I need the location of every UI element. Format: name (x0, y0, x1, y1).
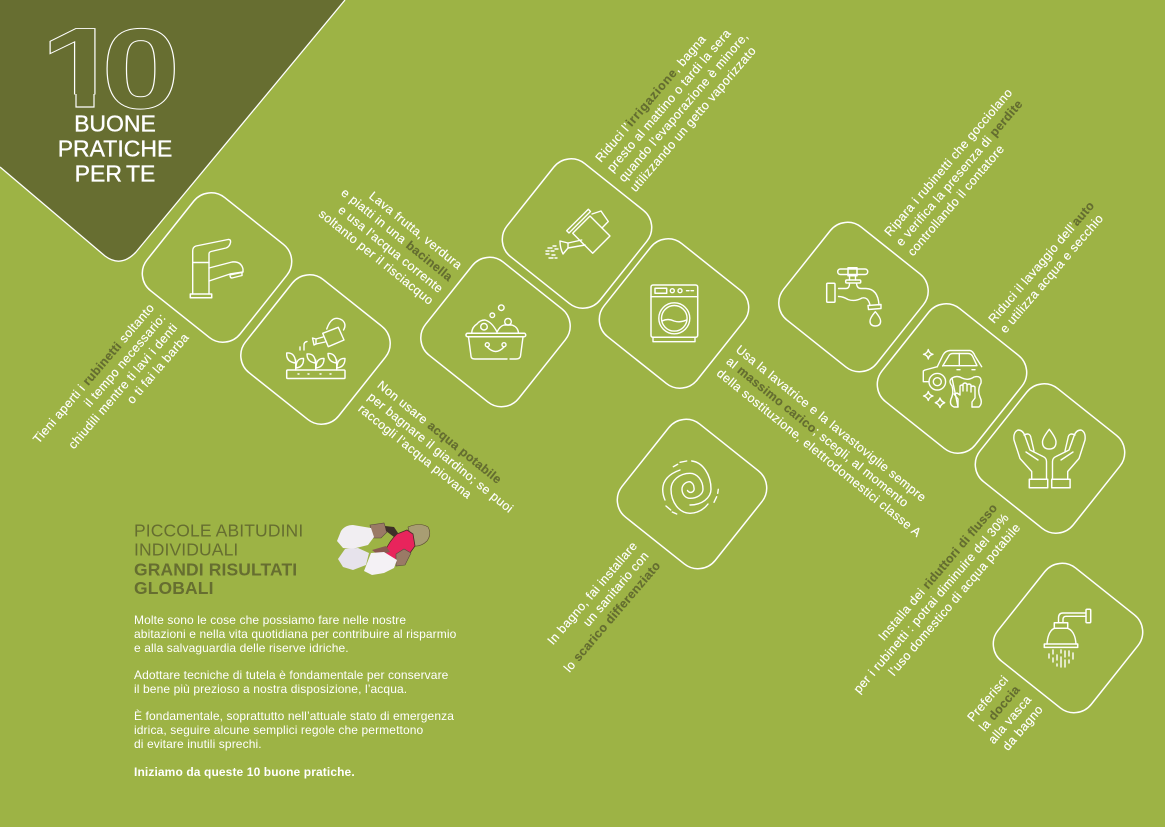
body text: Molte sono le cose che possiamo fare nelle nostre (134, 613, 406, 627)
card: car wash (868, 295, 1036, 462)
card: shower (984, 554, 1152, 722)
title: buone pratiche per te (58, 111, 172, 187)
icon: watering can (546, 209, 610, 258)
icon: dripping tap (827, 268, 881, 326)
illustration: low-poly hands figure (337, 523, 430, 575)
text: bacinella: e usa l’acqua corrente (335, 203, 446, 296)
card: dripping tap (770, 213, 937, 381)
text: doccia (962, 673, 1046, 757)
icon: car wash (923, 350, 982, 408)
title: buone pratiche per te: PRATICHE (58, 136, 172, 162)
body text: Iniziamo da queste 10 buone pratiche. (134, 765, 355, 779)
text: doccia: da bagno (1000, 702, 1046, 753)
text: riduttori di flusso: Installa dei riduttori di flusso (876, 501, 1000, 643)
card: spiral flush (608, 410, 776, 578)
text: rubinetti (30, 301, 192, 476)
text: perdite: controllando il contatore (905, 142, 1007, 259)
card: faucet (133, 184, 301, 351)
text: rubinetti: o ti fai la barba (124, 330, 192, 407)
heading: piccole abitudini grandi risultati globali: GRANDI RISULTATI (134, 560, 297, 580)
card: washing machine (590, 230, 758, 397)
icon: washing machine (651, 285, 698, 342)
title: buone pratiche per te: BUONE (74, 111, 156, 137)
text: rubinetti: il tempo necessario: (81, 311, 169, 410)
title number 10 outlined (50, 28, 175, 110)
text: bacinella: e piatti in una bacinella (338, 186, 455, 284)
body text: abitazioni e nella vita quotidiana per contribuire al risparmio (134, 627, 457, 641)
text: irrigazione: quando l’evaporazione è minore, (616, 29, 751, 185)
text: doccia: Preferisci (964, 673, 1011, 724)
text: irrigazione (593, 10, 763, 195)
card: plants (232, 266, 399, 433)
text: massimo carico: della sostituzione, elettrodomestici classe A (714, 366, 924, 540)
title panel: dark corner (0, 0, 345, 261)
text: rubinetti: Tieni aperti i rubinetti soltanto (30, 301, 157, 446)
card: hands and water drop (966, 375, 1134, 542)
body text: e alla salvaguardia delle riserve idriche. (134, 641, 349, 655)
text: acqua potabile: Non usare acqua potabile (375, 378, 504, 487)
text: irrigazione: Riduci l’irrigazione, bagna (593, 32, 709, 165)
text: acqua potabile: raccogli l’acqua piovana (355, 402, 475, 502)
text: lavaggio auto: e utilizza acqua e secchio (997, 211, 1106, 336)
title number 10 outlined: 1 (40, 4, 122, 132)
text: doccia: la doccia (976, 683, 1023, 734)
body text: di evitare inutili sprechi. (134, 737, 262, 751)
heading: piccole abitudini grandi risultati globali: INDIVIDUALI (134, 540, 238, 560)
text: bacinella: Lava frutta, verdura (366, 189, 465, 272)
text: lavaggio auto: Riduci il lavaggio dell’auto (986, 199, 1097, 326)
text: perdite: Ripara i rubinetti che gocciolano (882, 86, 1015, 239)
text: bacinella (316, 171, 465, 308)
title: buone pratiche per te: PER TE (75, 161, 155, 187)
text: scarico differenziato: un sanitario con (580, 549, 652, 629)
heading: piccole abitudini grandi risultati globali: GLOBALI (134, 578, 214, 598)
text: massimo carico: al massimo carico; scegli, al momento (724, 354, 911, 510)
text: scarico differenziato (538, 539, 663, 675)
text: irrigazione: presto al mattino o tardi la sera (604, 26, 734, 175)
text: doccia: alla vasca (985, 693, 1034, 747)
body text: il bene più prezioso a nostra disposizione, l’acqua. (134, 682, 407, 696)
icon: water swirl (663, 461, 718, 514)
icon: basin with soap (466, 305, 526, 359)
card: basin (412, 248, 579, 416)
text: riduttori di flusso: per i rubinetti : potrai diminuire del 30% (851, 511, 1012, 696)
body text: È fondamentale, soprattutto nell’attuale stato di emergenza (134, 708, 454, 723)
text: perdite: e verifica la presenza di perdite (893, 97, 1026, 249)
heading: piccole abitudini grandi risultati globali (134, 521, 303, 598)
body text: Adottare tecniche di tutela è fondamentale per conservare (134, 668, 449, 682)
text: scarico differenziato: In bagno, fai installare (545, 539, 640, 647)
title number 10 outlined: 0 (102, 6, 180, 133)
icon: shower head (1044, 609, 1091, 667)
text: acqua potabile: per bagnare il giardino; se puoi (365, 390, 516, 516)
icon: faucet (190, 239, 243, 298)
text: riduttori di flusso: l’uso domestico di acqua potabile (886, 521, 1023, 679)
text: bacinella: soltanto per il risciacquo (316, 207, 436, 308)
body text (134, 613, 457, 779)
icon: watering plants (287, 318, 345, 378)
text: massimo carico: Usa la lavatrice e la lavastoviglie sempre (733, 342, 929, 505)
text: scarico differenziato: lo scarico differenziato (561, 559, 663, 675)
card: watering can (493, 150, 661, 317)
heading: piccole abitudini grandi risultati globali: PICCOLE ABITUDINI (134, 521, 303, 541)
text: rubinetti: chiudili mentre ti lavi i denti (66, 321, 180, 452)
text: irrigazione: utilizzando un getto vaporizzato (627, 44, 759, 195)
icon: hands holding drop (1014, 429, 1085, 488)
body text: idrica, seguire alcune semplici regole che permettono (134, 723, 424, 737)
